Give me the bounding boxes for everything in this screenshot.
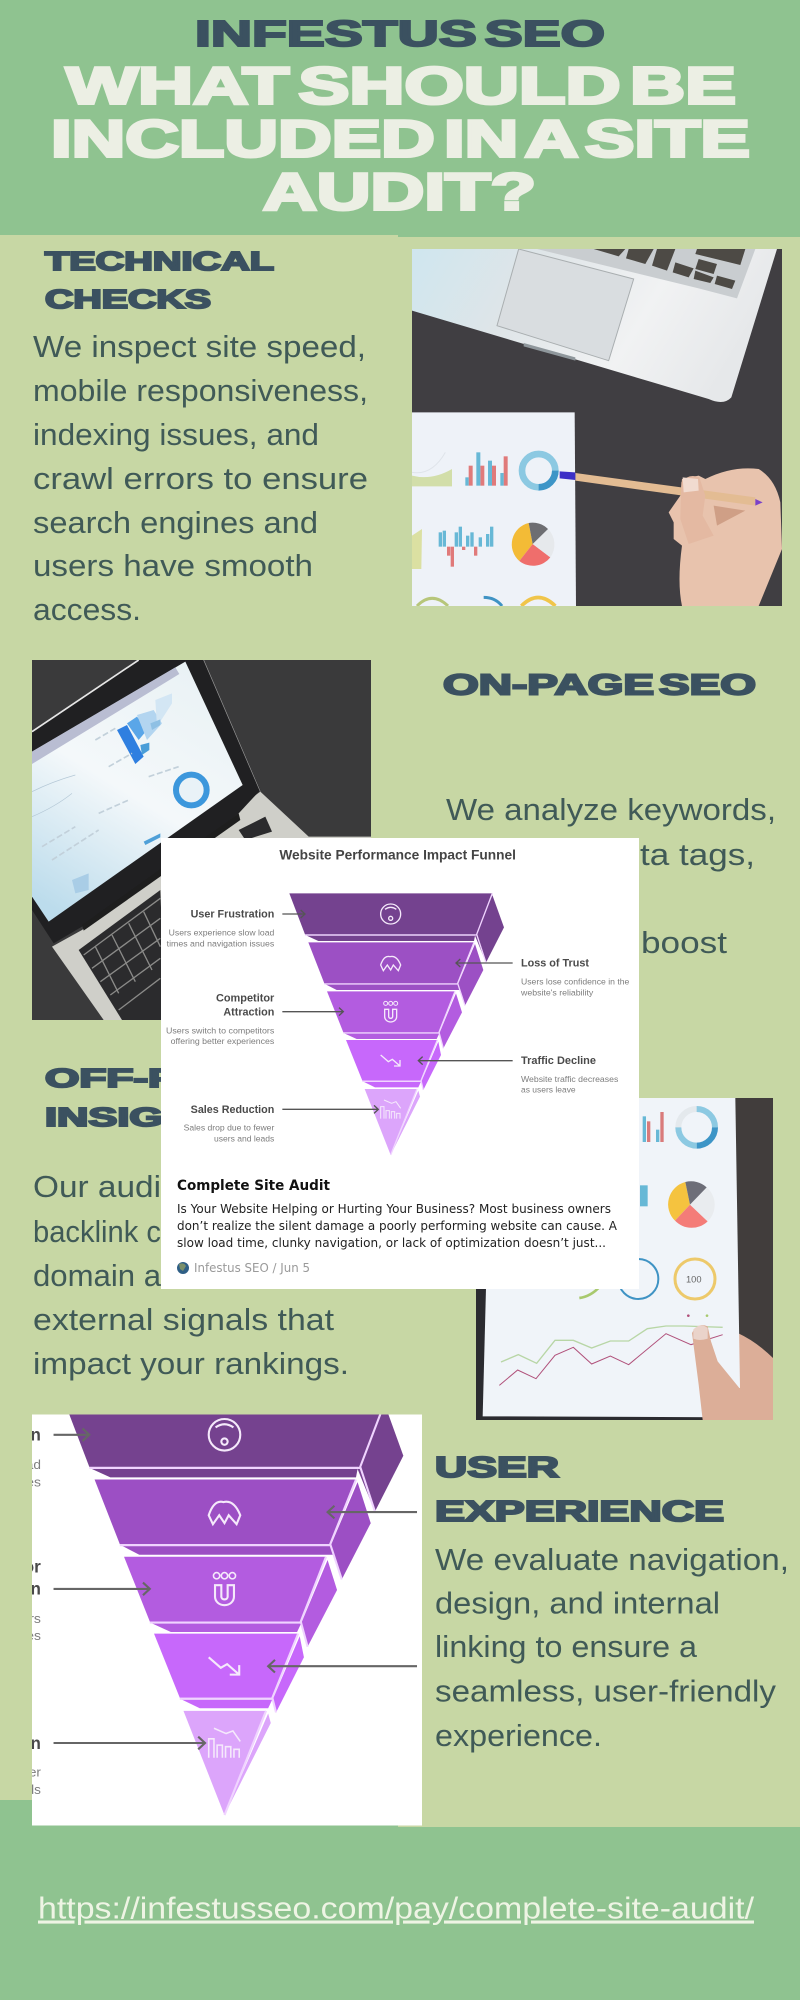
crop segment 2 bbox=[95, 1479, 371, 1579]
heading: technical checks bbox=[45, 246, 274, 314]
title: INCLUDED IN A SITE bbox=[51, 110, 750, 168]
card description: Is Your Website Helping or Hurting Your Business? Most business owners bbox=[177, 1201, 611, 1216]
label: loss of trust: Loss of Trust bbox=[521, 958, 589, 970]
label: user frustration bbox=[167, 909, 275, 949]
label: competitor attraction: Competitor bbox=[216, 992, 275, 1004]
photo: laptop and charts with hand bbox=[412, 249, 782, 606]
label: competitor attraction: Users switch to competitors bbox=[166, 1025, 274, 1035]
card byline: Infestus SEO / Jun 5 bbox=[194, 1260, 310, 1275]
photo: printed charts with hand bbox=[476, 1098, 773, 1420]
text: user experience: design, and internal bbox=[435, 1586, 720, 1620]
crop segment 5 bbox=[183, 1711, 271, 1815]
footer link: https://infestusseo.com/pay/complete-site-audit/ bbox=[38, 1890, 754, 1926]
text: technical checks: We inspect site speed, bbox=[33, 329, 366, 364]
text: off-page insights: domain a bbox=[33, 1258, 162, 1293]
funnel chart bbox=[166, 847, 630, 1155]
funnel segment 3 bbox=[327, 991, 462, 1048]
header band bbox=[0, 0, 800, 237]
text: technical checks: crawl errors to ensure bbox=[33, 461, 368, 496]
text: off-page insights: Our audi bbox=[33, 1169, 161, 1204]
label: loss of trust: website's reliability bbox=[520, 987, 594, 997]
heading: user experience bbox=[435, 1452, 724, 1528]
crop segment 4 bbox=[154, 1634, 304, 1712]
text: off-page insights: impact your rankings. bbox=[33, 1346, 349, 1381]
label: competitor attraction: Attraction bbox=[223, 1006, 275, 1018]
text: technical checks: indexing issues, and bbox=[33, 417, 319, 452]
crop label fragments bbox=[0, 1425, 42, 1797]
label: user frustration: User Frustration bbox=[191, 909, 275, 921]
title: AUDIT? bbox=[263, 164, 536, 222]
card description bbox=[177, 1201, 617, 1250]
label: sales reduction: users and leads bbox=[214, 1134, 274, 1144]
card description: don’t realize the silent damage a poorly performing website can cause. A bbox=[177, 1218, 617, 1233]
label: competitor attraction bbox=[166, 992, 275, 1046]
card title: Complete Site Audit bbox=[177, 1178, 330, 1194]
text: on-page seo bbox=[446, 792, 776, 960]
label: sales reduction bbox=[184, 1104, 275, 1144]
text: on-page seo: We analyze keywords, bbox=[446, 792, 776, 827]
label: traffic decline: Traffic Decline bbox=[521, 1055, 596, 1067]
heading: on-page seo: ON-PAGE SEO bbox=[443, 670, 756, 702]
text: technical checks: mobile responsiveness, bbox=[33, 373, 368, 408]
heading: user experience: EXPERIENCE bbox=[435, 1496, 724, 1528]
crop segment 3 bbox=[124, 1557, 337, 1647]
label: 100 percent ring: 100 bbox=[686, 1274, 702, 1284]
heading: technical checks: TECHNICAL bbox=[45, 246, 274, 276]
heading: off-page insights bbox=[45, 1063, 270, 1132]
funnel segment 1 bbox=[289, 893, 504, 963]
text: off-page insights: external signals that bbox=[33, 1302, 334, 1337]
text: user experience: experience. bbox=[435, 1718, 602, 1753]
chart title: Website Performance Impact Funnel bbox=[279, 847, 516, 862]
label: traffic decline: Website traffic decreases bbox=[521, 1074, 618, 1084]
heading: off-page insights: INSIGHTS bbox=[45, 1102, 250, 1132]
crop arrows bbox=[54, 1428, 417, 1749]
title: WHAT SHOULD BE bbox=[66, 58, 736, 116]
label: user frustration: Users experience slow load bbox=[169, 928, 275, 938]
text: user experience: linking to ensure a bbox=[435, 1629, 698, 1664]
heading: technical checks: CHECKS bbox=[45, 284, 211, 314]
text: technical checks bbox=[33, 329, 368, 627]
footer band bbox=[0, 1800, 800, 2000]
funnel segment 5 bbox=[365, 1089, 420, 1155]
text: user experience bbox=[435, 1542, 789, 1753]
image: enlarged funnel crop bbox=[32, 1414, 422, 1826]
card: site audit preview bbox=[161, 838, 639, 1289]
text: technical checks: search engines and bbox=[33, 505, 318, 540]
label: sales reduction: Sales drop due to fewer bbox=[184, 1123, 275, 1133]
label: competitor attraction: offering better experiences bbox=[171, 1036, 274, 1046]
text: off-page insights bbox=[33, 1169, 349, 1381]
arrows bbox=[282, 910, 513, 1113]
text: off-page insights: backlink c bbox=[33, 1214, 161, 1249]
brand heading: INFESTUS SEO bbox=[195, 13, 605, 54]
funnel segment 4 bbox=[346, 1040, 441, 1090]
text: technical checks: access. bbox=[33, 592, 141, 627]
label: loss of trust: Users lose confidence in the bbox=[521, 976, 630, 986]
label: traffic decline bbox=[521, 1055, 618, 1095]
label: loss of trust bbox=[520, 958, 630, 997]
text: technical checks: users have smooth bbox=[33, 548, 313, 583]
text: user experience: seamless, user-friendly bbox=[435, 1674, 777, 1708]
text: on-page seo: boost bbox=[641, 925, 727, 960]
icon: globe bbox=[177, 1262, 189, 1274]
label: user frustration: times and navigation issues bbox=[167, 939, 274, 949]
label: traffic decline: as users leave bbox=[521, 1085, 576, 1095]
crop segment 1 bbox=[69, 1414, 404, 1511]
label: sales reduction: Sales Reduction bbox=[191, 1104, 275, 1116]
heading: user experience: USER bbox=[435, 1452, 559, 1484]
funnel segment 2 bbox=[308, 942, 483, 1006]
text: user experience: We evaluate navigation, bbox=[435, 1542, 789, 1577]
card description: slow load time, clunky navigation, or lack of optimization doesn’t just... bbox=[177, 1235, 606, 1250]
title bbox=[51, 58, 750, 222]
heading: off-page insights: OFF-PAGE bbox=[45, 1063, 270, 1093]
photo: laptop with analytics dashboard bbox=[32, 660, 372, 1020]
text: on-page seo: ta tags, bbox=[640, 837, 755, 872]
